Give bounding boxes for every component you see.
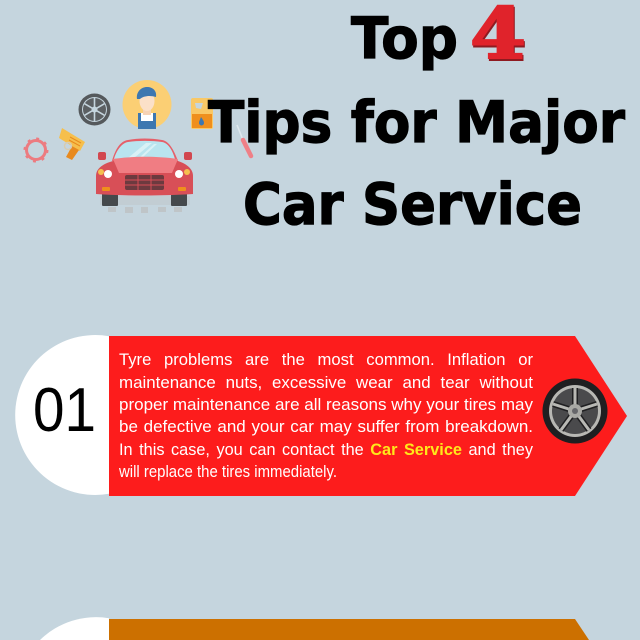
panel: tip 02 (cropped) bbox=[40, 617, 589, 640]
tip text: proper maintenance are all reasons why your tires may bbox=[119, 396, 534, 414]
number badge bbox=[15, 335, 109, 495]
icon: oil can bbox=[191, 98, 213, 129]
title line: Car Service: Car Service bbox=[243, 172, 582, 238]
tip text: maintenance nuts, excessive wear and tear without bbox=[119, 374, 533, 392]
icon: screwdriver bbox=[237, 125, 251, 156]
icon: tyre bbox=[542, 378, 608, 444]
tip text: In this case, you can contact the Car Service and they bbox=[119, 441, 534, 459]
icon: red car bbox=[96, 138, 193, 213]
icon: mechanic portrait bbox=[122, 80, 172, 129]
tip text bbox=[118, 351, 534, 481]
orange arrow banner bbox=[109, 619, 589, 640]
number 01: 01 bbox=[33, 376, 96, 445]
panel: tip 01 bbox=[15, 335, 627, 496]
icon: wheel bbox=[78, 94, 110, 126]
title line: Top: Top bbox=[351, 6, 458, 72]
tip text: will replace the tires immediately. bbox=[118, 463, 337, 481]
tip text: Tyre problems are the most common. Inflation or bbox=[119, 351, 533, 369]
illustration: mechanic and car bbox=[24, 80, 213, 213]
red arrow banner bbox=[109, 336, 627, 496]
title bbox=[208, 0, 625, 238]
icon: spray gun bbox=[59, 128, 85, 160]
number badge bbox=[40, 617, 109, 640]
tip text: be defective and your car may suffer from breakdown. bbox=[119, 418, 533, 436]
icon: gear bbox=[24, 138, 48, 162]
